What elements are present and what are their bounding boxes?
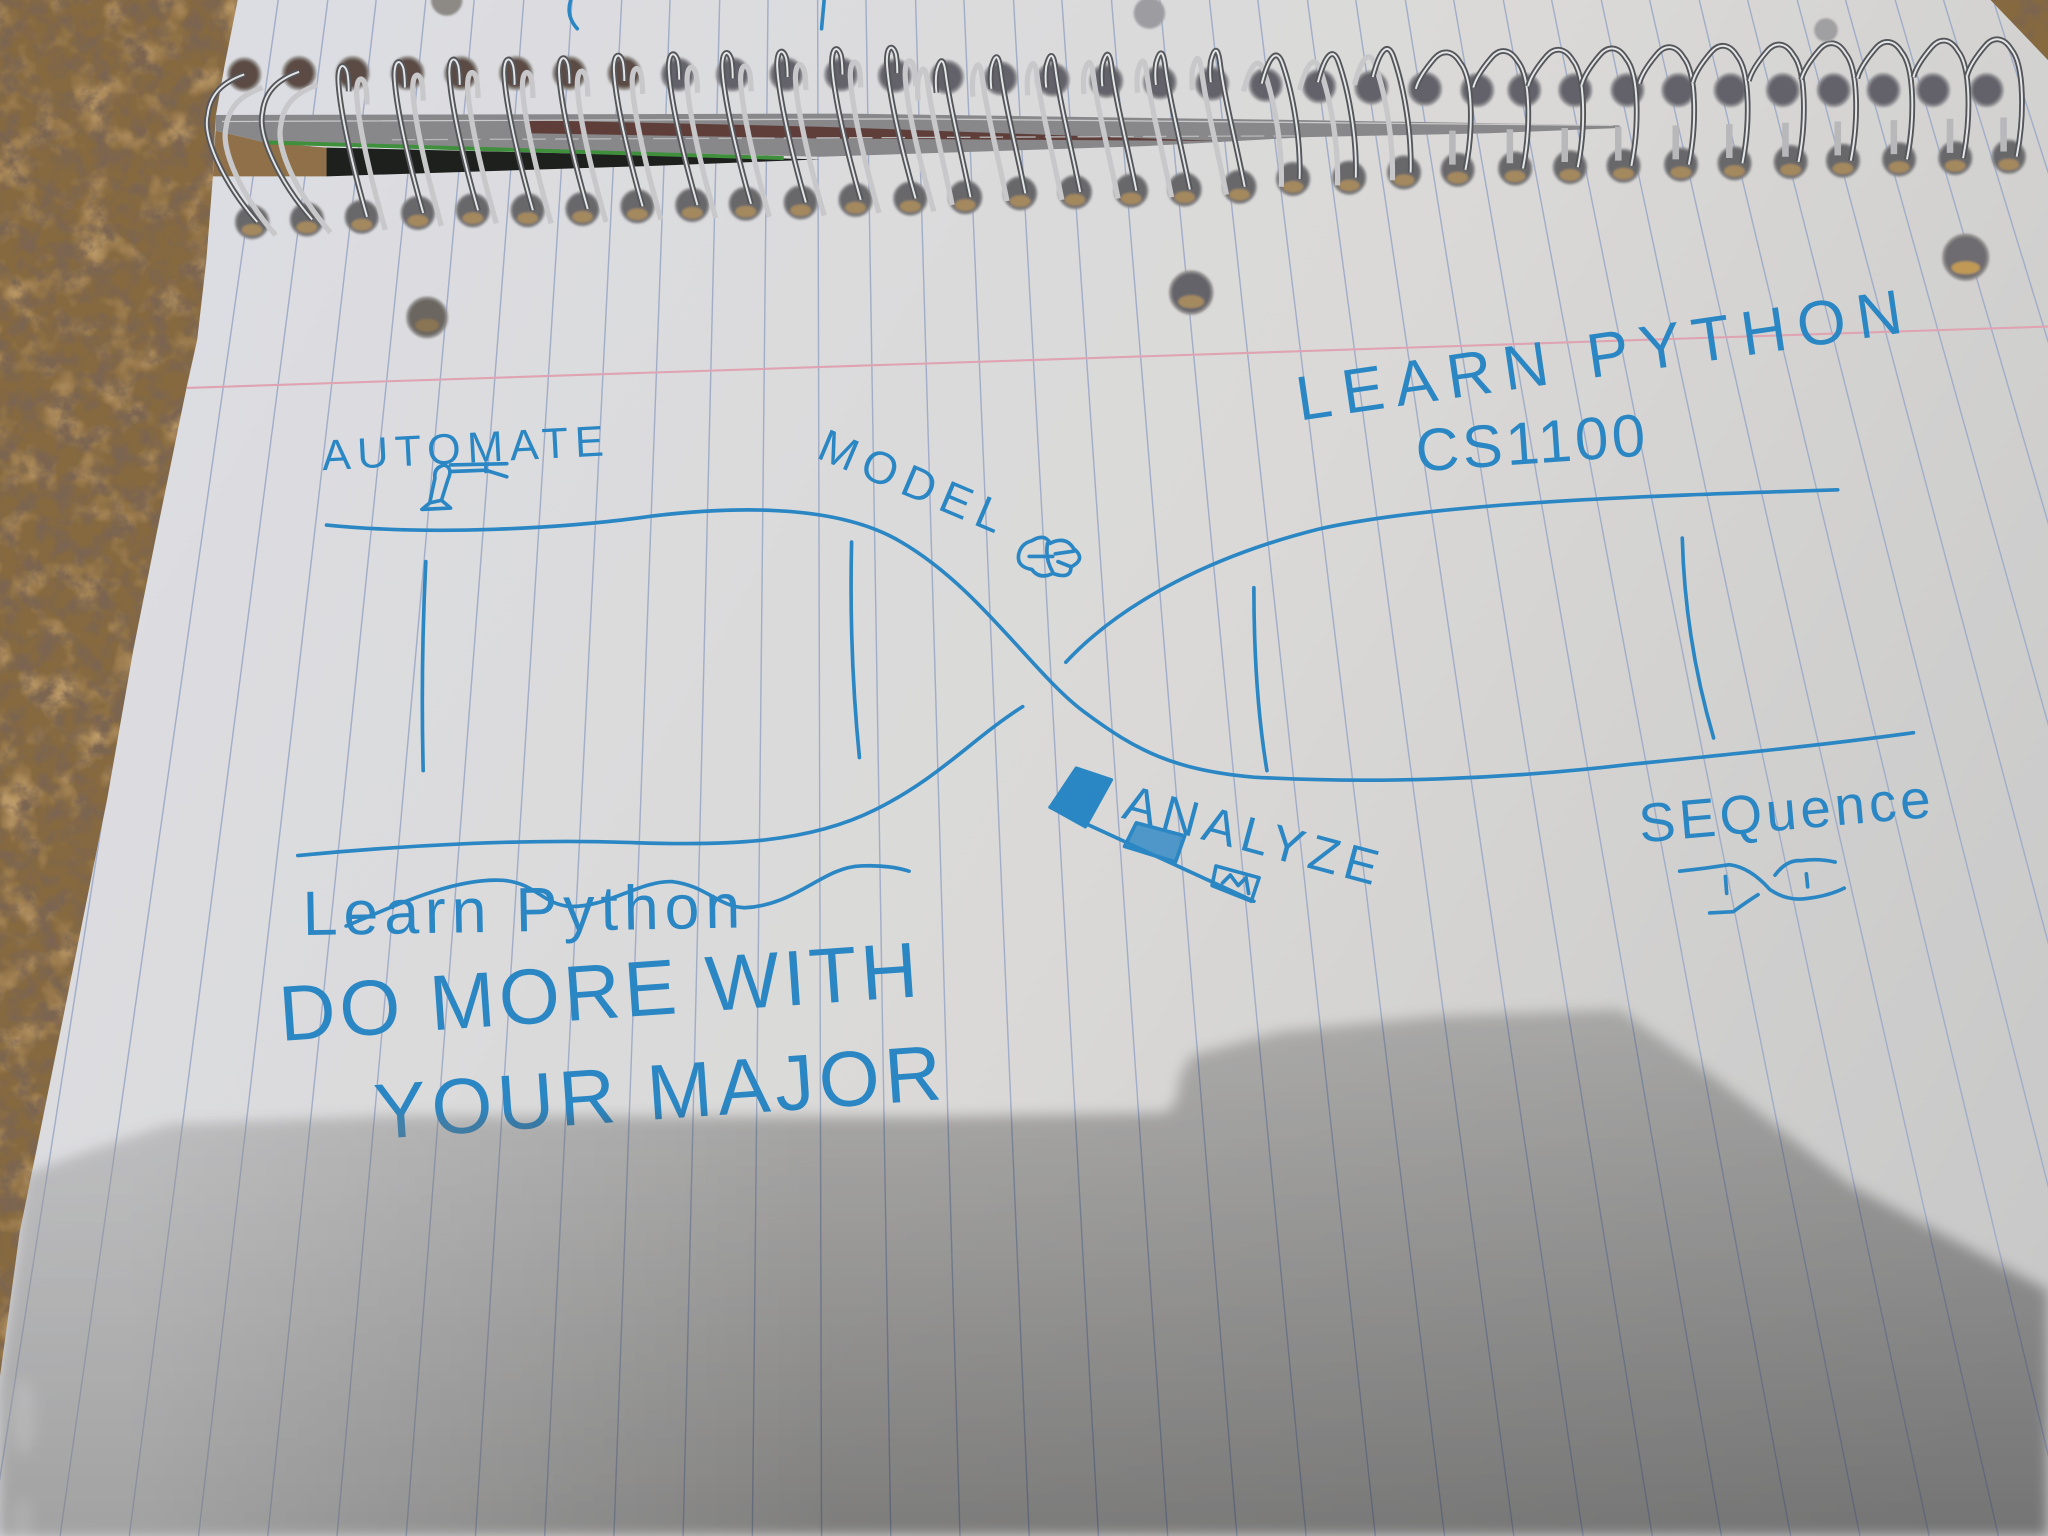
- cast shadow over paper: [0, 1010, 2048, 1536]
- curve: top-left to bottom-right: [327, 510, 1913, 780]
- stage divider 2: [851, 542, 859, 758]
- struck-through text: learn python: [302, 866, 909, 949]
- upper spiral holes: [229, 57, 2002, 106]
- pink margin line: [187, 327, 2048, 388]
- lower spiral holes: [236, 140, 2025, 238]
- heading: do more with your major: DO MORE WITH: [276, 926, 920, 1058]
- heading: do more with your major: YOUR MAJOR: [371, 1028, 944, 1156]
- struck-through text: learn python: Learn Python: [302, 872, 741, 949]
- label: sequence: SEQuence: [1636, 767, 1933, 854]
- label: model: MODEL: [811, 419, 1011, 543]
- icon: descending bars: [1050, 768, 1259, 901]
- icon: brain: [1018, 537, 1080, 576]
- label: analyze: ANALYZE: [1118, 774, 1385, 896]
- stage divider 3: [1254, 588, 1267, 771]
- folded pages band: [213, 114, 1620, 176]
- metal spiral binding: [207, 39, 2022, 235]
- title: learn python cs1100: LEARN PYTHON: [1292, 277, 1906, 434]
- icon: small sequence curve: [1680, 860, 1844, 913]
- curve: bottom-left rising: [298, 707, 1023, 856]
- punched holes in sheet: [408, 0, 1988, 337]
- ink marks from previous page: [569, 0, 824, 29]
- heading: do more with your major: [276, 926, 944, 1156]
- title: learn python cs1100: CS1100: [1413, 402, 1647, 484]
- s-curve double diamond diagram: [298, 490, 1913, 856]
- stage divider 4: [1682, 538, 1714, 738]
- icon: robot arm: [422, 464, 507, 509]
- curve: centre to top-right: [1066, 490, 1838, 662]
- label: automate: AUTOMATE: [321, 417, 605, 480]
- stage divider 1: [422, 562, 426, 771]
